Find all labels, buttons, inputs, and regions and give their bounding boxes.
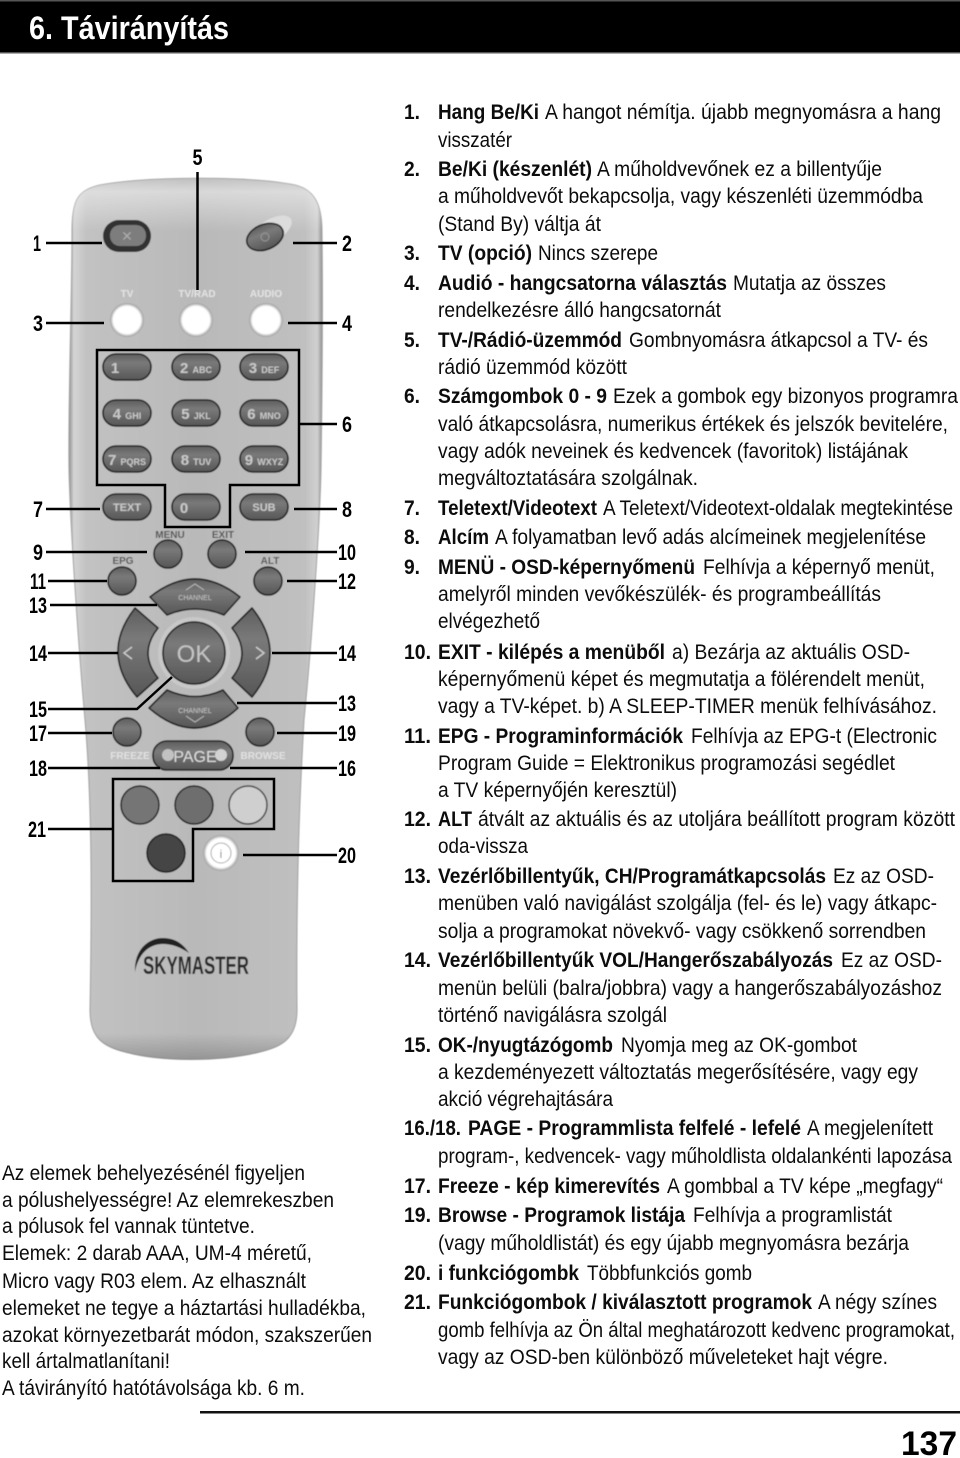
callout 1	[33, 231, 102, 256]
item 12	[404, 808, 955, 858]
callout 5: 5	[192, 145, 202, 170]
battery notes text block: azokat környezetbarát módon, szakszerűen	[2, 1324, 372, 1347]
AUDIO button	[249, 289, 283, 337]
item 9: Felhívja a képernyő menüt,	[703, 556, 935, 579]
TEXT button: TEXT	[113, 502, 141, 514]
battery notes text block: elemeket ne tegye a háztartási hulladékba,	[2, 1297, 366, 1320]
OK button	[158, 617, 230, 689]
item 1: Hang Be/Ki	[438, 101, 539, 124]
EPG button	[108, 556, 136, 595]
callout 11: 11	[30, 569, 46, 594]
callout 7: 7	[33, 497, 43, 522]
item 6: vagy adók neveinek és kedvencek (favoritok) listájának	[438, 440, 908, 463]
item 1	[404, 101, 941, 152]
item 2: Be/Ki (készenlét)	[438, 158, 592, 181]
BROWSE button	[240, 718, 286, 762]
Skymaster logo	[135, 938, 249, 980]
EXIT button	[208, 530, 236, 568]
channel up button: CHANNEL	[178, 595, 212, 602]
callout 21 function box: 21	[28, 817, 46, 842]
AUDIO button: AUDIO	[250, 289, 282, 300]
item 6: Számgombok 0 - 9	[438, 385, 607, 408]
Skymaster logo: SKYMASTER	[143, 952, 249, 980]
item 8: 8.	[404, 526, 420, 549]
callout 15: 15	[29, 697, 47, 722]
remote bevel	[69, 178, 322, 1060]
volume left button	[118, 608, 158, 697]
callout 3	[33, 311, 104, 336]
function button 1	[121, 786, 159, 824]
item 2	[404, 158, 923, 236]
item 4: rendelkezésre álló hangcsatornát	[438, 299, 721, 322]
item 13	[404, 865, 937, 943]
item 21	[404, 1291, 955, 1369]
item 3: 3.	[404, 242, 420, 265]
callout 6 keypad box	[97, 350, 352, 527]
item 21: Funkciógombok / kiválasztott programok	[438, 1291, 812, 1314]
number keypad: 0	[180, 500, 188, 517]
item 5: rádió üzemmód között	[438, 356, 627, 379]
callout 13 right: 13	[338, 691, 356, 716]
callout 20	[243, 843, 356, 868]
callout lines and numbers	[28, 145, 357, 881]
item 1: visszatér	[438, 129, 512, 152]
OK button: OK	[177, 641, 211, 668]
remote control	[69, 178, 322, 1060]
callout 16: 16	[338, 756, 356, 781]
callout 16	[230, 756, 356, 781]
item 11	[404, 725, 937, 802]
item 10: képernyőmenü képet és megmutatja a fölérendelt menüt,	[438, 668, 925, 691]
callout 2: 2	[342, 231, 352, 256]
ALT button	[254, 556, 282, 595]
item 17: 17.	[404, 1175, 431, 1198]
callout 3: 3	[33, 311, 43, 336]
MENU button: MENU	[155, 530, 185, 541]
callout 14 left: 14	[29, 641, 48, 666]
item 2: 2.	[404, 158, 420, 181]
number keypad: 9 WXYZ	[245, 452, 284, 469]
number keypad: 2 ABC	[180, 360, 213, 377]
callout 9: 9	[33, 540, 43, 565]
item 19: Browse - Programok listája	[438, 1204, 685, 1227]
TV button: TV	[121, 289, 134, 300]
SUB button: SUB	[252, 502, 276, 514]
item 7: 7.	[404, 497, 420, 520]
item 12: ALT	[438, 808, 472, 831]
number keypad: 3 DEF	[249, 360, 280, 377]
item 6	[404, 385, 958, 490]
item 4: Mutatja az összes	[733, 272, 886, 295]
function button 2	[175, 786, 213, 824]
item 16/18: 16./18.	[404, 1117, 461, 1140]
EXIT button: EXIT	[212, 530, 234, 541]
item 12: oda-vissza	[438, 835, 528, 858]
item 6: 6.	[404, 385, 420, 408]
function button 3	[229, 786, 267, 824]
item 3: Nincs szerepe	[538, 242, 658, 265]
number keypad: 8 TUV	[181, 452, 211, 469]
title: 6. Távirányítás	[29, 10, 229, 46]
item 1: 1.	[404, 101, 420, 124]
callout 19	[277, 721, 356, 746]
callout 19: 19	[338, 721, 356, 746]
item 16/18: PAGE - Programmlista felfelé - lefelé	[468, 1117, 801, 1140]
number keypad: 7 PQRS	[108, 452, 146, 469]
item 15: a kezdeményezett változtatás megerősítésére, vagy egy	[438, 1061, 918, 1084]
item 13: 13.	[404, 865, 431, 888]
function button 4	[147, 834, 185, 872]
item 16/18: A megjelenített	[807, 1117, 933, 1140]
item 9: amelyről minden vevőkészülék- és programbeállítás	[438, 583, 881, 606]
item 11: 11.	[404, 725, 431, 748]
item 5	[404, 329, 928, 379]
TV/RAD button: TV/RAD	[178, 289, 216, 300]
item 14: 14.	[404, 949, 431, 972]
item 19	[404, 1204, 909, 1255]
number keypad: 5 JKL	[181, 406, 211, 423]
callout 10	[245, 540, 356, 565]
item 15	[404, 1034, 918, 1111]
ALT button: ALT	[261, 556, 279, 567]
callout 14 left	[29, 641, 118, 666]
callout 12	[287, 569, 356, 594]
battery notes text block: A távirányító hatótávolsága kb. 6 m.	[2, 1377, 305, 1400]
item 17: A gombbal a TV képe „megfagy“	[667, 1175, 943, 1198]
callout 6 keypad box: 6	[342, 412, 352, 437]
item 9: MENÜ - OSD-képernyőmenü	[438, 556, 695, 579]
item 4: 4.	[404, 272, 420, 295]
MENU button	[154, 530, 185, 568]
item 21: vagy az OSD-ben különböző műveleteket hajt végre.	[438, 1346, 888, 1369]
item 5: 5.	[404, 329, 420, 352]
item 20: 20.	[404, 1262, 431, 1285]
callout 9	[33, 540, 147, 565]
item 10: a) Bezárja az aktuális OSD-	[672, 641, 910, 664]
callout 12: 12	[338, 569, 356, 594]
battery notes text block: a pólushelyességre! Az elemrekeszben	[2, 1189, 334, 1212]
item 5: TV-/Rádió-üzemmód	[438, 329, 622, 352]
channel up button	[150, 579, 240, 615]
item 3: TV (opció)	[438, 242, 532, 265]
item 19: 19.	[404, 1204, 431, 1227]
item 11: Felhívja az EPG-t (Electronic	[691, 725, 937, 748]
callout 13 left: 13	[29, 593, 47, 618]
item 20	[404, 1262, 752, 1285]
item 19: Felhívja a programlistát	[693, 1204, 892, 1227]
callout 4	[288, 311, 353, 336]
item 14: történő navigálásra szolgál	[438, 1004, 667, 1027]
item 11: EPG - Programinformációk	[438, 725, 683, 748]
SUB button	[240, 494, 288, 520]
item 10	[404, 641, 937, 718]
callout 2	[293, 231, 352, 256]
item 12: 12.	[404, 808, 431, 831]
mute button	[103, 220, 151, 252]
callout 10: 10	[338, 540, 356, 565]
item 11: Program Guide = Elektronikus programozási segédlet	[438, 752, 895, 775]
callout 15	[29, 677, 172, 722]
item 5: Gombnyomásra átkapcsol a TV- és	[629, 329, 928, 352]
item 21: 21.	[404, 1291, 431, 1314]
channel down button: CHANNEL	[178, 708, 212, 715]
battery notes text block: a pólusok fel vannak tüntetve.	[2, 1215, 255, 1238]
item 13: Ez az OSD-	[833, 865, 934, 888]
item 4: Audió - hangcsatorna választás	[438, 272, 727, 295]
channel down button	[149, 690, 238, 728]
number keypad: 6 MNO	[247, 406, 281, 423]
callout 20: 20	[338, 843, 356, 868]
BROWSE button: BROWSE	[240, 751, 286, 762]
callout 21 function box	[28, 779, 274, 881]
item 7	[404, 497, 953, 520]
item 10: EXIT - kilépés a menüből	[438, 641, 665, 664]
battery notes text block	[2, 1162, 372, 1400]
item 14	[404, 949, 942, 1027]
item 13: Vezérlőbillentyűk, CH/Programátkapcsolás	[438, 865, 826, 888]
number keypad: 4 GHI	[113, 406, 141, 423]
item 15: akció végrehajtására	[438, 1088, 613, 1111]
TEXT button	[103, 494, 151, 520]
item 15: Nyomja meg az OK-gombot	[621, 1034, 857, 1057]
FREEZE button: FREEZE	[110, 751, 150, 762]
callout 7	[33, 497, 100, 522]
TV/RAD button	[178, 289, 216, 337]
power button	[243, 209, 297, 256]
item 7: Teletext/Videotext	[438, 497, 597, 520]
function list	[404, 101, 958, 1369]
info button: i	[220, 847, 222, 861]
callout 4: 4	[342, 311, 353, 336]
header bar	[0, 0, 960, 54]
number keypad	[103, 354, 288, 520]
item 15: 15.	[404, 1034, 431, 1057]
callout 11	[30, 569, 107, 594]
info button	[203, 835, 239, 871]
mute button: ✕	[121, 228, 133, 244]
item 20: Többfunkciós gomb	[587, 1262, 752, 1285]
battery notes text block: Micro vagy R03 elem. Az elhasznált	[2, 1270, 306, 1293]
item 14: Vezérlőbillentyűk VOL/Hangerőszabályozás	[438, 949, 833, 972]
item 14: Ez az OSD-	[841, 949, 942, 972]
volume right button	[232, 608, 270, 697]
battery notes text block: Az elemek behelyezésénél figyeljen	[2, 1162, 305, 1185]
item 9: 9.	[404, 556, 420, 579]
item 2: A műholdvevőnek ez a billentyűje	[597, 158, 882, 181]
item 6: megváltoztatására szolgálnak.	[438, 467, 698, 490]
item 8: Alcím	[438, 526, 489, 549]
item 17: Freeze - kép kimerevítés	[438, 1175, 660, 1198]
item 3	[404, 242, 658, 265]
footer rule	[200, 1411, 960, 1414]
callout 1: 1	[33, 231, 41, 256]
item 4	[404, 272, 886, 322]
battery notes text block: Elemek: 2 darab AAA, UM-4 méretű,	[2, 1242, 312, 1265]
callout 14 right: 14	[338, 641, 357, 666]
item 15: OK-/nyugtázógomb	[438, 1034, 613, 1057]
callout 18: 18	[29, 756, 47, 781]
remote body	[69, 178, 322, 1060]
callout 13 left	[29, 593, 157, 618]
callout 13 right	[237, 691, 356, 716]
number keypad: 1	[111, 360, 119, 377]
PAGE button: PAGE	[173, 749, 217, 766]
item 2: (Stand By) váltja át	[438, 213, 601, 236]
item 9	[404, 556, 935, 633]
callout 17: 17	[29, 721, 47, 746]
item 19: (vagy műholdlistát) és egy újabb megnyomásra bezárja	[438, 1232, 909, 1255]
item 11: a TV képernyőjén keresztül)	[438, 779, 677, 802]
item 2: a műholdvevőt bekapcsolja, vagy készenléti üzemmódba	[438, 185, 923, 208]
TV button	[110, 289, 144, 337]
item 21: A négy színes	[818, 1291, 937, 1314]
callout 18	[29, 756, 160, 781]
callout 8: 8	[342, 497, 352, 522]
callout 14 right	[272, 641, 357, 666]
callout 8	[294, 497, 352, 522]
EPG button: EPG	[112, 556, 134, 567]
FREEZE button	[110, 718, 150, 762]
item 8: A folyamatban levő adás alcímeinek megjelenítése	[495, 526, 926, 549]
item 9: elvégezhető	[438, 610, 540, 633]
item 10: 10.	[404, 641, 431, 664]
item 20: i funkciógombk	[438, 1262, 579, 1285]
battery notes text block: kell ártalmatlanítani!	[2, 1350, 170, 1373]
item 13: solja a programokat növekvő- vagy csökkenő sorrendben	[438, 920, 926, 943]
item 16/18	[404, 1117, 952, 1168]
PAGE button	[153, 741, 233, 770]
item 17	[404, 1175, 943, 1198]
callout 17	[29, 721, 112, 746]
